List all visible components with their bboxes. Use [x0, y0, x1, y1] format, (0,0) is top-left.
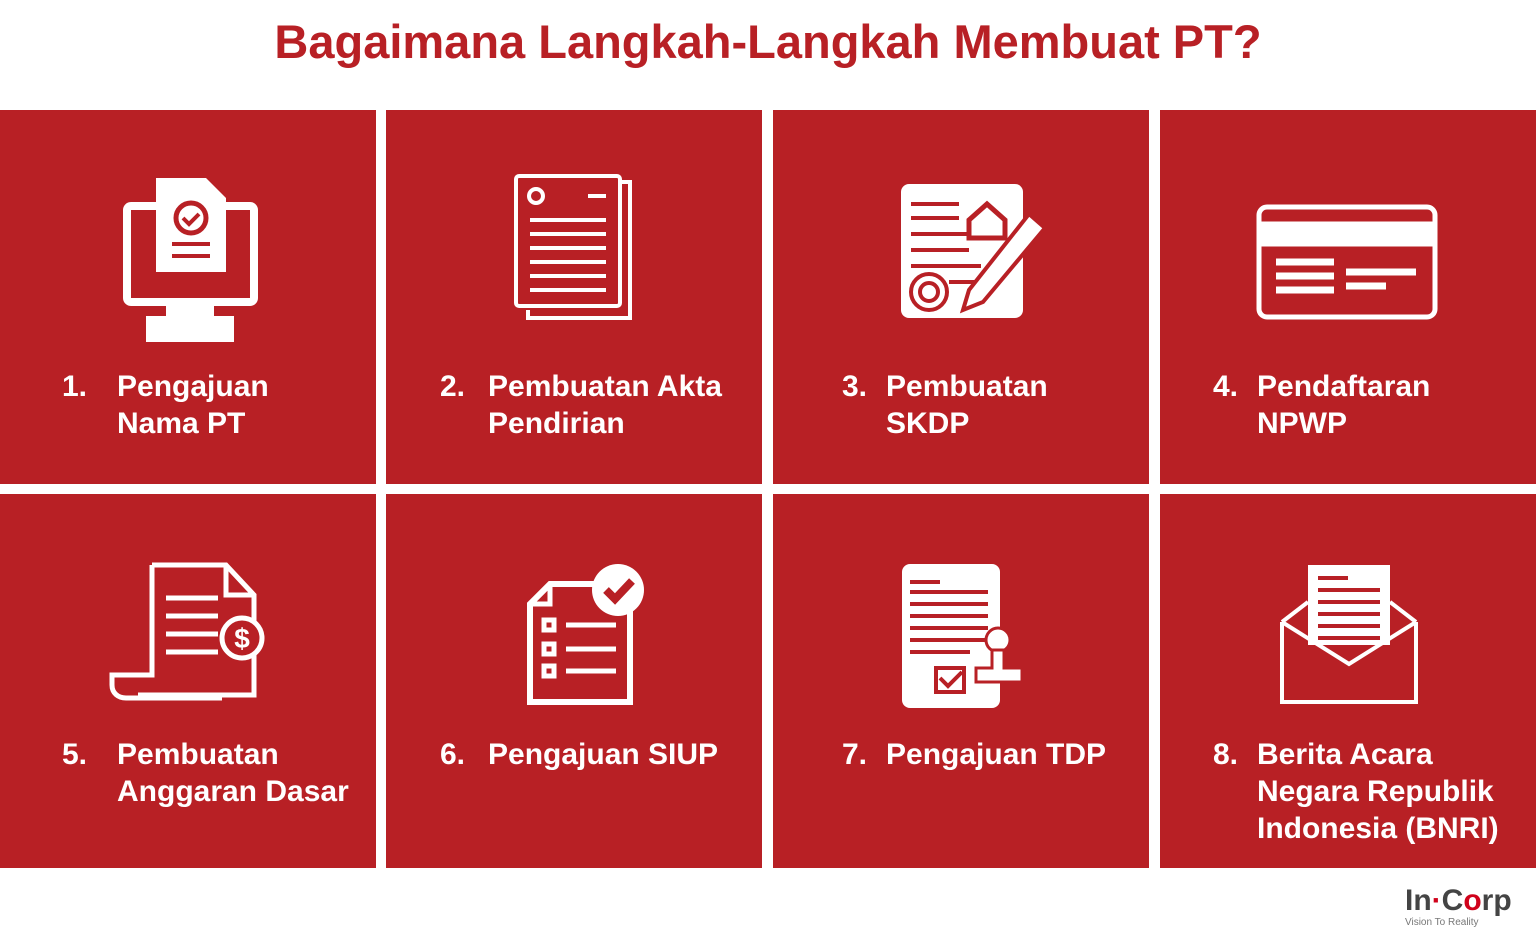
label: 1. [62, 370, 87, 403]
label: Pengajuan TDP [886, 738, 1106, 771]
label: Pembuatan Akta [488, 370, 722, 403]
label [62, 370, 269, 440]
label [440, 370, 722, 440]
label: Indonesia (BNRI) [1257, 812, 1499, 845]
icon: budget document [110, 562, 264, 700]
label: 6. [440, 738, 465, 771]
label: 8. [1213, 738, 1238, 771]
panel: step 7 [773, 494, 1149, 868]
label [1213, 738, 1499, 845]
label: Anggaran Dasar [117, 775, 349, 808]
icon: computer document [123, 178, 258, 342]
label: Pendaftaran [1257, 370, 1430, 403]
label: 7. [842, 738, 867, 771]
panel: step 6 [386, 494, 762, 868]
label: 5. [62, 738, 87, 771]
label: Pengajuan [117, 370, 269, 403]
label [62, 738, 349, 808]
panel: step 3 [773, 110, 1149, 484]
logo: InCorp: Vision To Reality [1405, 917, 1479, 928]
panel: step 5 [0, 494, 376, 868]
label [842, 370, 1048, 440]
label: Pengajuan SIUP [488, 738, 718, 771]
label: Negara Republik [1257, 775, 1494, 808]
label: 2. [440, 370, 465, 403]
label: Pendirian [488, 407, 625, 440]
label: Pembuatan [886, 370, 1048, 403]
icon: envelope with letter [1280, 565, 1418, 704]
panel: step 8 [1160, 494, 1536, 868]
title: Bagaimana Langkah-Langkah Membuat PT? [274, 15, 1262, 68]
icon: checklist [527, 564, 644, 705]
panel: step 2 [386, 110, 762, 484]
icon: document [514, 174, 632, 320]
label: Pembuatan [117, 738, 279, 771]
label: 3. [842, 370, 867, 403]
label: NPWP [1257, 407, 1347, 440]
icon: certificate with pen [901, 184, 1042, 318]
label [1213, 370, 1430, 440]
label: Berita Acara [1257, 738, 1433, 771]
label: Nama PT [117, 407, 245, 440]
icon: card [1256, 204, 1438, 320]
label: SKDP [886, 407, 969, 440]
logo: InCorp: In·Corp [1405, 884, 1512, 917]
icon: stamped document [902, 564, 1020, 708]
icon: budget document: $ [234, 623, 250, 654]
label: 4. [1213, 370, 1238, 403]
panel: step 4 [1160, 110, 1536, 484]
panel: step 1 [0, 110, 376, 484]
